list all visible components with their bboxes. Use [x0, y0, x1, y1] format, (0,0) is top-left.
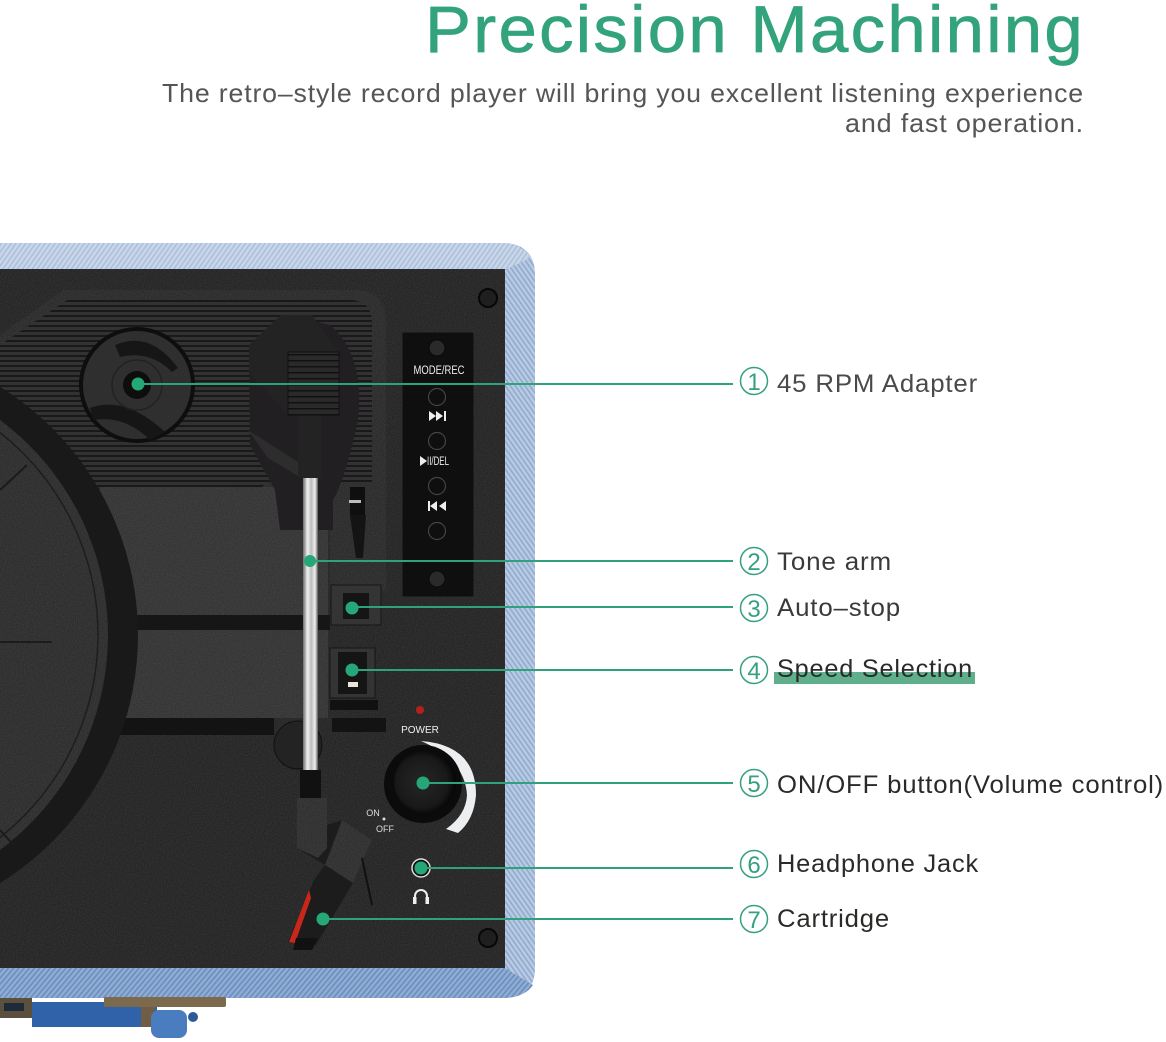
callout 6: Headphone Jack	[414, 850, 979, 879]
subtitle text: The retro–style record player will bring you excellent listening experience	[162, 78, 1084, 108]
power LED and label	[401, 706, 439, 736]
volume knob	[366, 741, 476, 834]
tonearm ribbed plate	[0, 290, 386, 590]
bottom latch and handle hardware	[0, 997, 226, 1038]
platter	[0, 343, 138, 927]
power LED and label: POWER	[401, 725, 439, 736]
black top panel	[0, 269, 505, 968]
denim case	[0, 243, 535, 998]
callout 4: Speed Selection: Speed Selection	[777, 655, 973, 683]
tonearm	[248, 315, 372, 950]
callout 3: Auto-stop	[346, 594, 901, 623]
tonearm base	[249, 315, 359, 530]
callout 7: Cartridge: 7	[747, 907, 761, 934]
callout 2: Tone arm: Tone arm	[777, 548, 892, 576]
callout 5: ON/OFF button: 5	[747, 771, 761, 798]
tonearm pivot	[274, 721, 322, 769]
callout 1: 45 RPM Adapter: 1	[747, 369, 761, 396]
callout 1: 45 RPM Adapter	[132, 368, 978, 398]
callout 5: ON/OFF button: ON/OFF button(Volume control)	[777, 771, 1164, 799]
volume knob: ON	[366, 808, 380, 818]
subtitle text: and fast operation.	[845, 108, 1084, 138]
callout 3: Auto-stop: Auto–stop	[777, 594, 901, 622]
volume knob: OFF	[376, 824, 394, 834]
headphone jack	[412, 859, 430, 904]
callout 3: Auto-stop: 3	[747, 596, 761, 623]
callout 2: Tone arm	[304, 548, 892, 576]
label highlight	[774, 672, 975, 684]
button strip: II/DEL	[427, 456, 449, 468]
callout 4: Speed Selection: 4	[747, 658, 761, 685]
callout 4: Speed Selection	[346, 655, 973, 685]
callout 6: Headphone Jack: Headphone Jack	[777, 850, 979, 878]
callout 6: Headphone Jack: 6	[747, 852, 761, 879]
callout 5: ON/OFF button	[416, 770, 1164, 799]
button strip	[402, 332, 474, 597]
subtitle text	[162, 78, 1084, 138]
textured deck blocks	[100, 487, 386, 735]
callout 7: Cartridge	[316, 905, 890, 934]
button strip: MODE/REC	[414, 365, 464, 377]
cue lever	[349, 487, 366, 558]
callout 7: Cartridge: Cartridge	[777, 905, 890, 933]
panel screws	[479, 289, 497, 947]
callout 1: 45 RPM Adapter: 45 RPM Adapter	[777, 370, 978, 398]
speed and auto-stop switches	[330, 585, 381, 710]
record player illustration	[0, 243, 535, 1038]
callout 2: Tone arm: 2	[747, 549, 761, 576]
45 RPM adapter	[79, 327, 195, 443]
